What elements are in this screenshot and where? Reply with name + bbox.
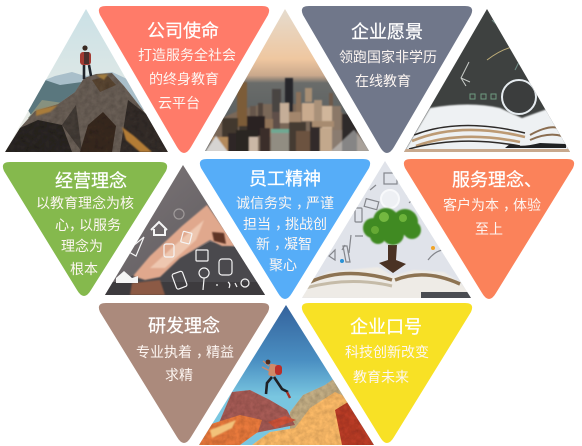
- text: employee spirit body: [236, 195, 334, 273]
- heading: company mission: 公司使命: [147, 21, 219, 41]
- photo: climber on mountain: [5, 9, 168, 152]
- icon: climber: [80, 45, 91, 79]
- text: R&D philosophy body: 专业执着 ，精益: [136, 344, 234, 360]
- panel: business philosophy: [3, 162, 167, 296]
- text: vision body: [339, 49, 437, 89]
- text: employee spirit body: 诚信务实 ，严谨: [236, 195, 334, 211]
- text: vision body: 在线教育: [355, 73, 411, 89]
- triangle: sky blue: [200, 159, 370, 299]
- heading: R&D philosophy: 研发理念: [148, 315, 220, 336]
- text: business philosophy body: 以教育理念为核: [36, 195, 134, 211]
- text: corporate slogan body: [345, 344, 429, 385]
- panel: employee spirit: [200, 159, 370, 299]
- text: employee spirit body: 新 ，凝智: [256, 236, 312, 252]
- heading: corporate slogan: 企业口号: [350, 317, 422, 337]
- heading: service philosophy: 服务理念、: [452, 169, 542, 190]
- heading: employee spirit: 员工精神: [249, 169, 321, 189]
- triangle: green: [3, 162, 167, 296]
- text: corporate slogan body: 科技创新改变: [345, 344, 429, 360]
- text: R&D philosophy body: [136, 344, 234, 383]
- panel: corporate vision: [302, 6, 472, 153]
- icon: magnifying glass: [502, 80, 536, 114]
- photo: book and blackboard: [400, 5, 575, 155]
- heading: corporate vision: 企业愿景: [351, 22, 423, 42]
- triangle: yellow: [302, 303, 472, 443]
- heading: business philosophy: 经营理念: [55, 170, 127, 191]
- triangle: slate grey: [302, 6, 472, 153]
- panel: service philosophy: [404, 159, 574, 299]
- text: service philosophy body: 客户为本 ，体验: [443, 197, 541, 213]
- photo: city skyline: [205, 9, 369, 151]
- icon: digital symbols: [127, 209, 249, 290]
- photo: hand touching digital icons: [105, 165, 265, 295]
- triangle: orange: [404, 159, 574, 299]
- panel: company mission: [99, 6, 269, 153]
- panel: corporate slogan: [302, 303, 472, 443]
- photo: tree growing from book: [302, 161, 471, 298]
- text: vision body: 领跑国家非学历: [339, 49, 437, 65]
- text: business philosophy body: 理念为: [61, 238, 103, 254]
- text: R&D philosophy body: 求精: [165, 367, 193, 383]
- text: mission body: 打造服务全社会: [138, 47, 236, 63]
- text: mission body: 的终身教育: [149, 71, 219, 87]
- text: business philosophy body: 根本: [70, 261, 98, 277]
- triangle: coral: [99, 6, 269, 153]
- photo: runner leaping over red rocks: [195, 302, 379, 446]
- text: business philosophy body: 心，以服务: [55, 217, 121, 233]
- text: business philosophy body: [36, 195, 134, 277]
- text: corporate slogan body: 教育未来: [353, 369, 409, 385]
- triangle: taupe: [99, 303, 269, 443]
- text: service philosophy body: 至上: [475, 221, 503, 237]
- text: mission body: 云平台: [158, 95, 200, 111]
- text: mission body: [138, 47, 236, 111]
- panel: R&D philosophy: [99, 303, 269, 443]
- text: employee spirit body: 聚心: [269, 257, 297, 273]
- icon: runner: [262, 360, 290, 398]
- text: employee spirit body: 担当 ，挑战创: [243, 216, 327, 232]
- text: service philosophy body: [443, 197, 541, 237]
